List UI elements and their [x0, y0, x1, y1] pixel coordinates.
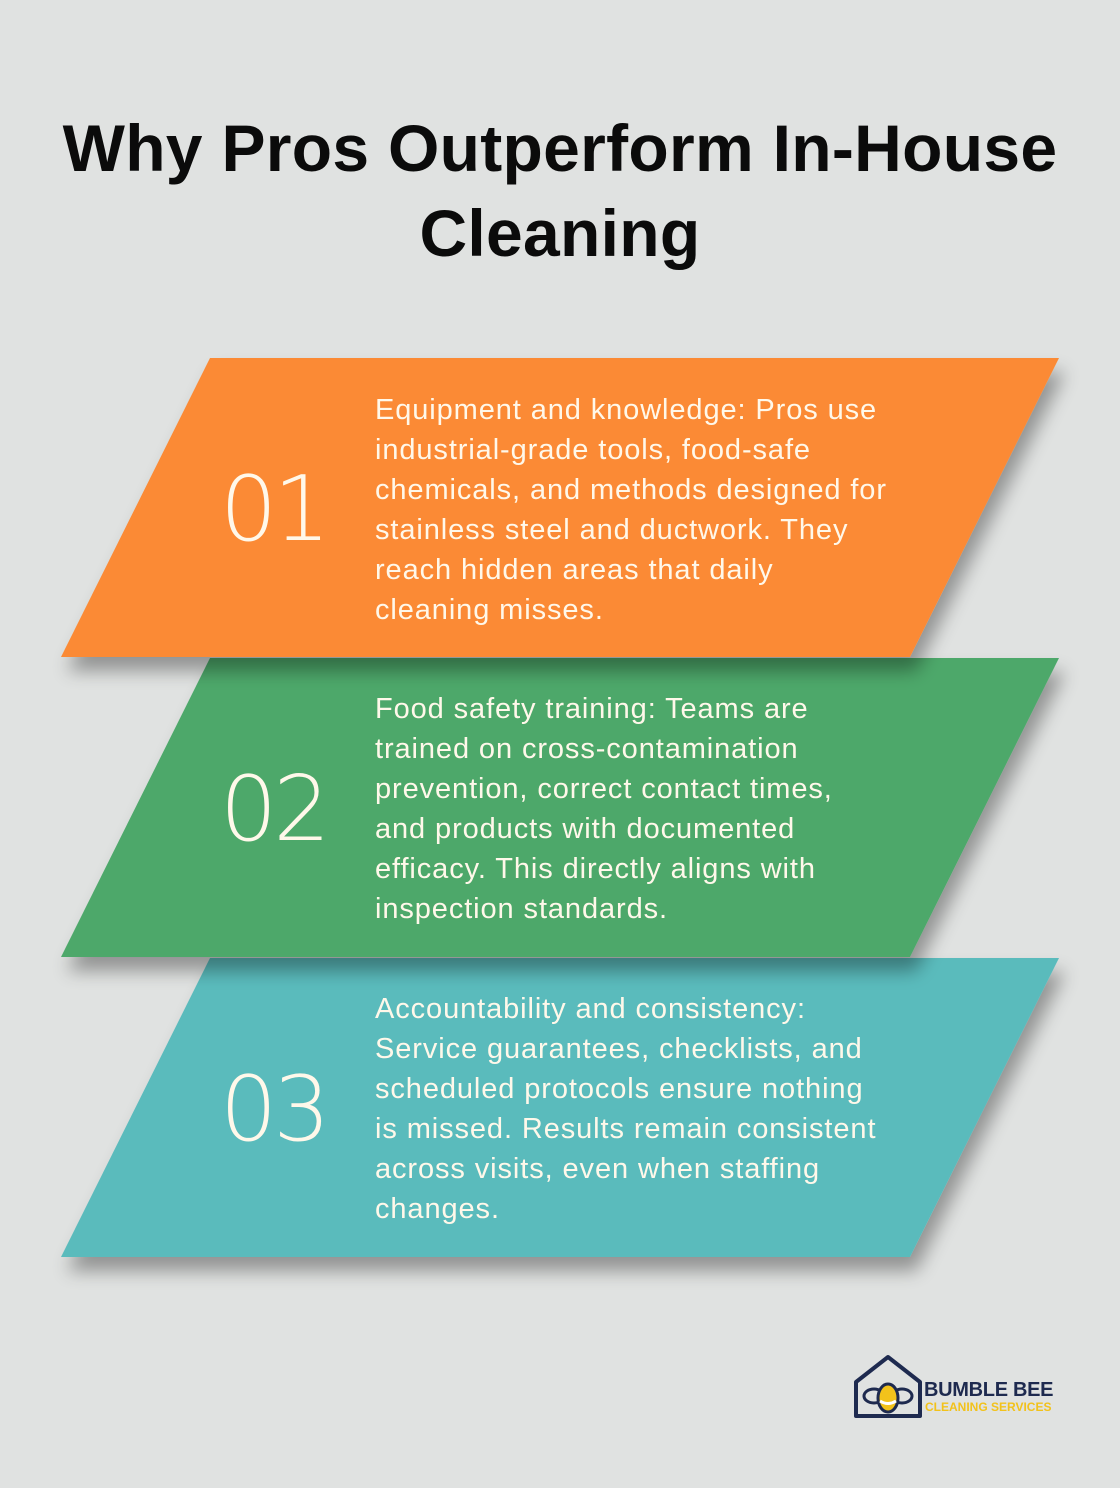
text 2: prevention, correct contact times, [375, 773, 833, 805]
text 3: is missed. Results remain consistent [375, 1113, 876, 1145]
text 1: Equipment and knowledge: Pros use [375, 394, 877, 426]
text 3: Accountability and consistency: [375, 993, 806, 1025]
text 3 [375, 993, 876, 1225]
text 2: and products with documented [375, 813, 795, 845]
number 03: 03 [220, 1057, 327, 1162]
band 3 [61, 958, 1059, 1257]
text 1: chemicals, and methods designed for [375, 474, 887, 506]
logo: CLEANING SERVICES [925, 1400, 1051, 1414]
text 1: stainless steel and ductwork. They [375, 514, 848, 546]
text 1: cleaning misses. [375, 594, 604, 626]
text 3: changes. [375, 1193, 500, 1225]
text 1 [375, 394, 887, 626]
band 2 [61, 658, 1059, 957]
number 02: 02 [220, 757, 327, 862]
text 2: Food safety training: Teams are [375, 693, 809, 725]
text 3: scheduled protocols ensure nothing [375, 1073, 863, 1105]
logo text: BUMBLE BEE [924, 1379, 1053, 1401]
title [62, 111, 1057, 270]
title: Cleaning [419, 196, 701, 270]
text 3: across visits, even when staffing [375, 1153, 820, 1185]
text 3: Service guarantees, checklists, and [375, 1033, 863, 1065]
logo [854, 1355, 1053, 1418]
text 1: reach hidden areas that daily [375, 554, 774, 586]
band 1 [61, 358, 1059, 657]
text 2: inspection standards. [375, 893, 668, 925]
title: Why Pros Outperform In-House [63, 111, 1057, 185]
icon: bee house [854, 1355, 922, 1418]
text 1: industrial-grade tools, food-safe [375, 434, 811, 466]
number 01: 01 [220, 457, 327, 562]
text 2 [375, 693, 833, 925]
text 2: efficacy. This directly aligns with [375, 853, 816, 885]
text 2: trained on cross-contamination [375, 733, 799, 765]
